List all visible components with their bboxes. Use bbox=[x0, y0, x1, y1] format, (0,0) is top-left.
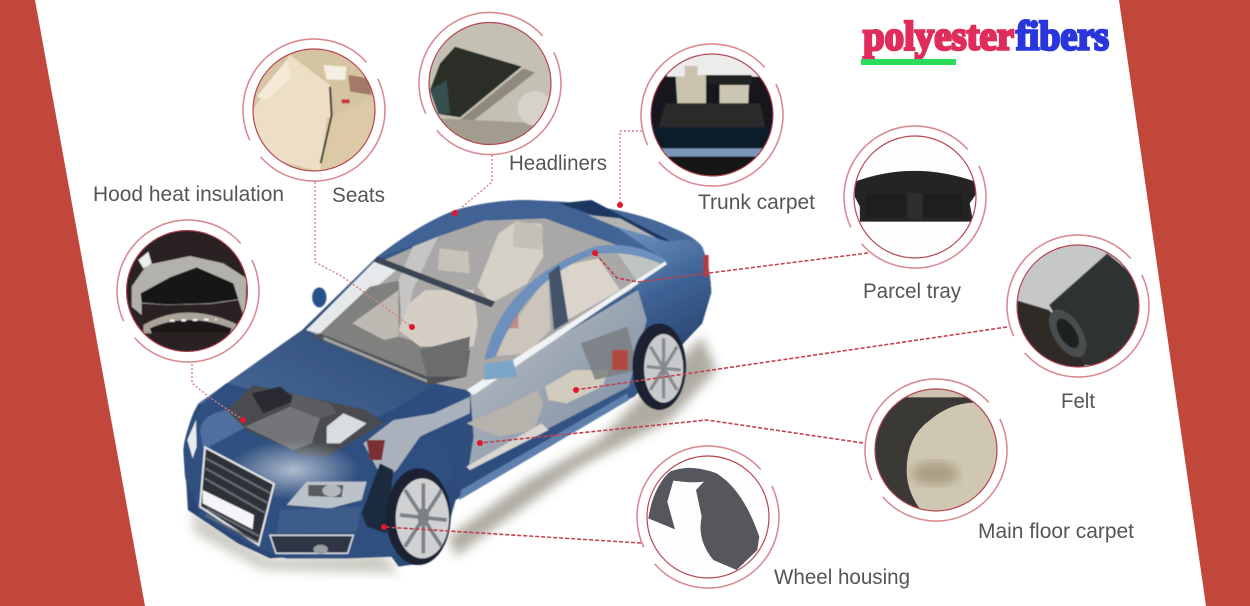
door seat bbox=[488, 280, 550, 357]
label: Headliners: Headliners bbox=[509, 152, 607, 175]
rear deck bbox=[559, 200, 668, 245]
dashboard band bbox=[313, 333, 470, 385]
connector: trunk carpet bbox=[620, 131, 642, 205]
roof bbox=[375, 200, 606, 258]
rear window bbox=[616, 252, 665, 280]
logo: polyesterfibers: polyester bbox=[863, 12, 1014, 58]
rear seat bbox=[477, 223, 543, 303]
hood bbox=[199, 330, 431, 457]
windshield top bar bbox=[374, 257, 495, 307]
rear tire bbox=[632, 323, 686, 410]
front rim bbox=[396, 478, 449, 558]
label: Hood heat insulation: Hood heat insulation bbox=[93, 183, 284, 206]
car body bbox=[184, 200, 711, 567]
panel: trunk carpet photo bbox=[640, 43, 784, 187]
cabin interior bbox=[306, 218, 666, 390]
suspension struts bbox=[363, 397, 470, 480]
windshield glass frame bbox=[306, 259, 399, 333]
front tire bbox=[386, 468, 451, 565]
red location dots bbox=[240, 202, 623, 530]
curved door pillar bbox=[484, 245, 666, 360]
label: Main floor carpet: Main floor carpet bbox=[978, 520, 1134, 543]
license plate bbox=[203, 490, 254, 529]
label: Felt: Felt bbox=[1061, 390, 1095, 413]
B pillar bbox=[549, 265, 568, 330]
car shadow bbox=[449, 337, 716, 557]
connector: hood heat insulation bbox=[192, 364, 243, 420]
connector: seats bbox=[315, 182, 412, 327]
rear headrest bbox=[513, 220, 543, 250]
lower panel bbox=[277, 507, 362, 533]
rear lower seat bbox=[545, 370, 609, 403]
spring front bbox=[504, 312, 518, 328]
car front section bbox=[183, 383, 470, 565]
tail light bbox=[704, 255, 709, 277]
left mirror bbox=[312, 287, 326, 307]
front lower seat bbox=[466, 390, 543, 437]
panel: main floor carpet photo bbox=[864, 378, 1008, 522]
left red background band bbox=[0, 0, 145, 606]
right red background band bbox=[1119, 0, 1250, 606]
view through windshield bbox=[320, 280, 470, 382]
beltline strip bbox=[466, 262, 667, 395]
engine bay bbox=[227, 385, 383, 457]
illustration: cutaway car bbox=[183, 200, 716, 573]
translucent nose glow bbox=[227, 440, 360, 500]
engine block bbox=[245, 407, 320, 450]
grille bbox=[200, 447, 274, 545]
front body bbox=[183, 383, 453, 558]
logo: polyesterfibers bbox=[861, 12, 1109, 65]
front headrest bbox=[438, 248, 470, 273]
door sill bbox=[466, 423, 549, 470]
panel: headliners photo bbox=[418, 12, 562, 156]
rear rim bbox=[644, 334, 683, 403]
wheel well bbox=[362, 463, 393, 533]
bumper vents bbox=[270, 535, 353, 553]
steering area bbox=[420, 337, 470, 377]
lower side cutaway bbox=[468, 290, 647, 470]
back door glass seat bbox=[559, 258, 620, 320]
connector: felt bbox=[575, 327, 1007, 390]
front seat bbox=[399, 290, 478, 347]
label: Seats: Seats bbox=[332, 184, 385, 207]
panel: parcel tray photo bbox=[843, 125, 987, 269]
logo: polyesterfibers: fibers bbox=[1016, 12, 1109, 58]
label: Trunk carpet: Trunk carpet bbox=[698, 191, 815, 214]
shadow under front bumper bbox=[191, 510, 399, 573]
panel: seats photo bbox=[242, 38, 386, 182]
connector: main floor carpet bbox=[480, 420, 863, 443]
right engine bits bbox=[327, 413, 367, 443]
intake bbox=[252, 387, 297, 413]
label: Parcel tray: Parcel tray bbox=[863, 280, 961, 303]
rear quarter panel bbox=[616, 227, 711, 387]
connector: parcel tray bbox=[595, 253, 868, 282]
panel: hood heat insulation photo bbox=[116, 219, 260, 363]
A-pillar bbox=[399, 237, 438, 337]
side mirror bbox=[484, 360, 517, 380]
left fender highlight bbox=[200, 410, 247, 450]
left headlight bbox=[187, 420, 197, 458]
rear suspension bbox=[581, 327, 638, 380]
connector: headliners bbox=[455, 155, 492, 213]
right headlight bbox=[287, 482, 367, 508]
panel: felt photo bbox=[1006, 234, 1150, 378]
connector: wheel housing bbox=[385, 527, 641, 543]
panel: wheel housing photo bbox=[636, 445, 780, 589]
label: Wheel housing: Wheel housing bbox=[774, 566, 910, 589]
